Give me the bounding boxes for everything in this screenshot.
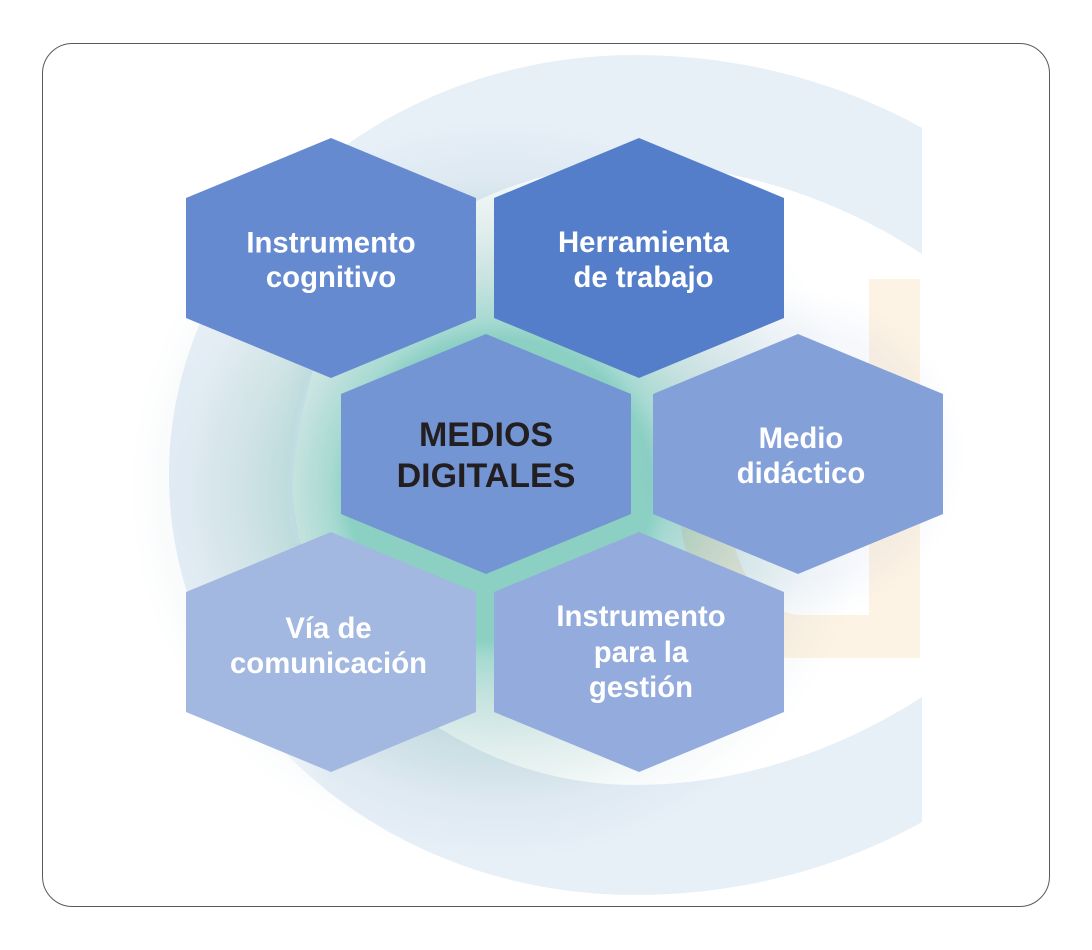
background logo: large C [169, 55, 922, 895]
hexagon: Instrumento cognitivo: cognitivo [266, 261, 396, 294]
hexagon: Instrumento cognitivo [186, 138, 476, 378]
hexagon: Herramienta de trabajo [494, 138, 784, 378]
hexagon: Vía de comunicación: Vía de [285, 612, 372, 645]
logo inner arc strip [290, 372, 310, 543]
side glow [635, 290, 965, 620]
hexagon: Herramienta de trabajo: Herramienta [558, 226, 730, 259]
hexagon: Medios digitales (center): MEDIOS [419, 416, 553, 454]
hexagon: Medios digitales (center) [341, 334, 631, 574]
hexagon: Medio didáctico [653, 334, 943, 574]
hexagon: Instrumento para la gestión [494, 532, 784, 772]
hexagon: Medio didáctico: Medio [759, 422, 843, 455]
hexagon: Vía de comunicación [186, 532, 476, 772]
hexagon: Medios digitales (center): DIGITALES [397, 457, 575, 495]
hexagon: Vía de comunicación: comunicación [230, 647, 427, 680]
background logo: orange bracket [680, 279, 920, 658]
hexagon: Medio didáctico: didáctico [737, 457, 865, 490]
soft glow behind hexagons [130, 120, 870, 860]
hexagon: Instrumento para la gestión: Instrumento [556, 600, 726, 633]
hexagon: Instrumento cognitivo: Instrumento [246, 226, 416, 260]
hexagon: Instrumento para la gestión: para la [594, 636, 689, 669]
hexagon: Herramienta de trabajo: de trabajo [573, 261, 714, 294]
hexagon: Instrumento para la gestión: gestión [589, 671, 693, 704]
